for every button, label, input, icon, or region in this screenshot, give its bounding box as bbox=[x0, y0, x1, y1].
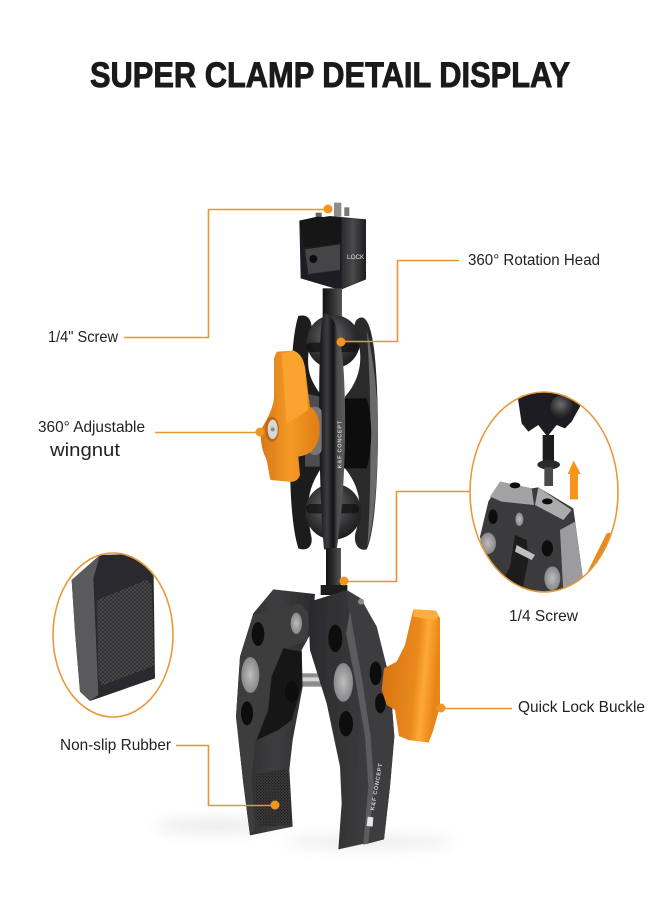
wingnut: quick lock buckle bbox=[382, 609, 440, 743]
callout: quick lock buckle bbox=[436, 699, 645, 716]
callout: quick lock buckle: Quick Lock Buckle bbox=[518, 699, 645, 716]
callout: non-slip rubber: Non-slip Rubber bbox=[60, 737, 172, 754]
callout: 360 adjustable wingnut: 360° Adjustable bbox=[38, 419, 145, 436]
cross rod bbox=[290, 673, 327, 687]
rotation head block: LOCK bbox=[347, 254, 365, 261]
front centre plate bbox=[319, 313, 345, 549]
rear plates bbox=[290, 316, 320, 549]
right jaw bbox=[308, 590, 394, 849]
callout: 360 rotation head bbox=[336, 252, 600, 346]
left jaw bbox=[236, 589, 315, 835]
balls bbox=[307, 315, 360, 368]
callout: non-slip rubber bbox=[60, 737, 280, 810]
wingnut: 360 adjustable bbox=[261, 351, 322, 482]
product: ball head arm: K&F CONCEPT bbox=[338, 420, 344, 468]
rotation head block bbox=[299, 203, 366, 290]
callout: 360 adjustable wingnut bbox=[38, 419, 264, 460]
callout: 360 rotation head: 360° Rotation Head bbox=[468, 252, 600, 269]
callout: 1/4 screw connector: 1/4 Screw bbox=[509, 608, 578, 625]
inset: 1/4 screw detail bbox=[470, 390, 618, 593]
product: crab clamp: K&F CONCEPT bbox=[370, 763, 384, 811]
title: SUPER CLAMP DETAIL DISPLAY bbox=[90, 56, 570, 95]
callout: 1/4 screw connector bbox=[340, 492, 578, 625]
centre body bbox=[305, 393, 320, 467]
collar bbox=[321, 585, 347, 595]
callout: 1/4 inch screw: 1/4" Screw bbox=[48, 329, 118, 346]
callout: 1/4 inch screw bbox=[48, 204, 332, 346]
post bbox=[323, 288, 342, 317]
ground shadow bbox=[155, 821, 455, 847]
callout: 360 adjustable wingnut: wingnut bbox=[49, 440, 120, 460]
product: ball head arm bbox=[261, 203, 378, 550]
stem below arm bbox=[326, 548, 341, 594]
rubber pad bbox=[255, 769, 292, 827]
inset: rubber pad detail bbox=[53, 553, 173, 717]
product: crab clamp bbox=[236, 585, 440, 849]
